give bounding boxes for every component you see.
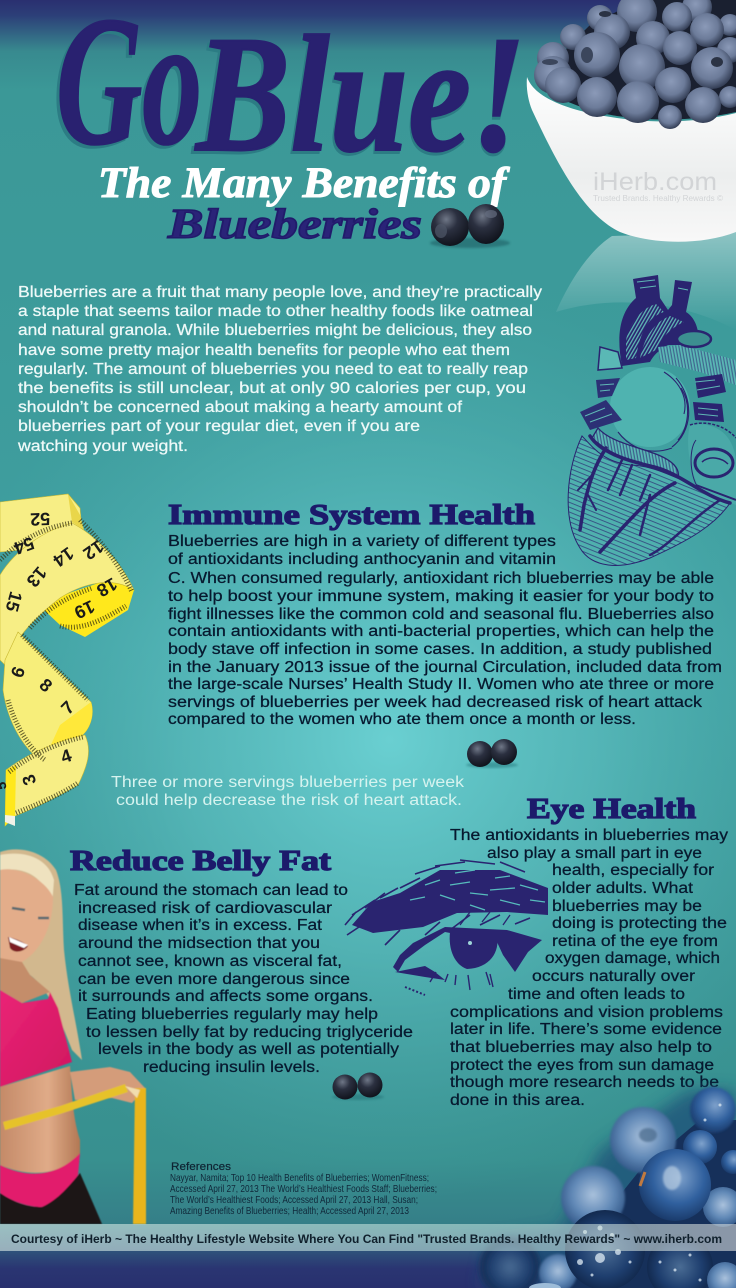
intro text: shouldn’t be concerned about making a hearty amount of xyxy=(18,399,463,416)
image: tape measure xyxy=(0,494,134,826)
bowl watermark: iHerb.com xyxy=(593,168,717,196)
intro text xyxy=(17,284,542,455)
coronary band xyxy=(592,428,678,478)
tape bottom band xyxy=(5,735,89,826)
references list: Accessed April 27, 2013 The World’s Healthiest Foods Staff; Blueberries; xyxy=(170,1183,437,1195)
tape lower curve xyxy=(3,632,92,762)
body text xyxy=(450,827,728,1109)
body text: it surrounds and affects some organs. xyxy=(78,988,373,1005)
soft shadow xyxy=(480,1090,736,1288)
body text: also play a small part in eye xyxy=(487,845,702,862)
tape numbers: 19 xyxy=(71,596,98,623)
bowl xyxy=(527,77,736,242)
callout: could help decrease the risk of heart attack. xyxy=(116,792,462,809)
body text xyxy=(74,882,413,1076)
midriff xyxy=(0,1066,80,1173)
heading: Eye Health xyxy=(527,793,696,825)
references heading: References xyxy=(171,1161,232,1173)
body text: retina of the eye from xyxy=(552,933,718,950)
references list: Amazing Benefits of Blueberries; Health; Accessed April 27, 2013 xyxy=(170,1205,409,1217)
face xyxy=(0,869,53,963)
body text: fight illnesses like the common cold and seasonal flu. Blueberries also xyxy=(168,606,714,623)
subtitle xyxy=(98,160,510,248)
left vessels xyxy=(580,347,622,430)
upper lid xyxy=(393,927,542,972)
arm xyxy=(70,1067,145,1103)
intro text: the benefits is still unclear, but at only 90 calories per cup, you xyxy=(18,380,526,397)
mouth xyxy=(8,937,28,952)
title shadow xyxy=(53,0,526,190)
tape numbers: 13 xyxy=(22,563,51,591)
tape numbers: 54 xyxy=(11,533,37,558)
heading: Reduce Belly Fat xyxy=(70,845,331,877)
body text: body stave off infection in some cases. In addition, a study published xyxy=(168,641,712,658)
image: woman measuring waist xyxy=(0,849,146,1224)
tape numbers: 12 xyxy=(80,536,107,564)
bowl watermark: Trusted Brands. Healthy Rewards © xyxy=(593,193,724,203)
references xyxy=(170,1161,437,1217)
tape back band xyxy=(0,494,82,552)
body text: later in life. There’s some evidence xyxy=(450,1021,722,1038)
measuring tape xyxy=(3,1084,146,1224)
tape numbers xyxy=(0,509,121,791)
body text: increased risk of cardiovascular xyxy=(78,900,332,917)
footer band xyxy=(0,1224,736,1251)
ventricle xyxy=(568,436,730,565)
body text: levels in the body as well as potentially xyxy=(98,1041,399,1058)
title shadow: Blue! xyxy=(191,5,526,190)
body text: though more research needs to be xyxy=(450,1074,719,1091)
body text xyxy=(168,533,722,728)
neck and chest xyxy=(0,958,50,1003)
intro text: watching your weight. xyxy=(17,438,188,455)
subtitle line two: Blueberries xyxy=(167,202,422,248)
body text: cannot see, known as visceral fat, xyxy=(78,953,342,970)
tape numbers: 8 xyxy=(36,675,56,696)
icon: pair of blueberries (lower) xyxy=(332,1072,384,1100)
section: reduce belly fat xyxy=(70,845,413,1076)
body text: oxygen damage, which xyxy=(545,950,720,967)
icon: pair of blueberries (title) xyxy=(430,204,510,248)
footer text: Courtesy of iHerb ~ The Healthy Lifestyle Website Where You Can Find "Trusted Brands. Healthy Rewards" ~ www.iherb.com xyxy=(11,1232,722,1246)
tape numbers: 9 xyxy=(7,664,29,680)
references list: The World’s Healthiest Foods; Accessed April 27, 2013 Hall, Susan; xyxy=(170,1194,418,1206)
body text: reducing insulin levels. xyxy=(143,1059,320,1076)
tape main band xyxy=(0,523,134,665)
references list xyxy=(170,1172,437,1217)
body text: Eating blueberries regularly may help xyxy=(86,1006,378,1023)
body text: done in this area. xyxy=(450,1092,585,1109)
body text: the large-scale Nurses’ Health Study II. Women who ate three or more xyxy=(168,676,714,693)
coronary arteries xyxy=(578,436,730,555)
intro text: have some pretty major health benefits for people who eat them xyxy=(18,342,510,359)
body text: occurs naturally over xyxy=(532,968,695,985)
tape numbers: 4 xyxy=(58,745,74,767)
droplets xyxy=(577,1104,722,1282)
intro text: Blueberries are a fruit that many people love, and they’re practically xyxy=(18,284,542,301)
intro text: a staple that seems tailor made to other healthy foods like oatmeal xyxy=(18,303,533,320)
tape numbers: 14 xyxy=(50,543,77,571)
section: immune system health xyxy=(168,499,722,728)
tape numbers: 18 xyxy=(93,574,121,601)
callout xyxy=(111,774,464,809)
eyebrow xyxy=(345,860,548,945)
heading: Immune System Health xyxy=(168,499,535,531)
tape ticks xyxy=(0,520,132,813)
berries xyxy=(480,1087,736,1288)
pink top xyxy=(0,990,72,1087)
title main: Blue! xyxy=(194,2,526,187)
lower lash xyxy=(395,966,445,980)
illustration: anatomical heart xyxy=(568,275,736,565)
tape numbers: 52 xyxy=(30,509,51,529)
hair back xyxy=(0,849,82,1060)
aorta arch xyxy=(619,275,698,366)
tape numbers: 15 xyxy=(2,589,26,614)
tape numbers: 7 xyxy=(57,697,78,718)
body text: to lessen belly fat by reducing triglyceride xyxy=(86,1024,413,1041)
callout: Three or more servings blueberries per week xyxy=(111,774,464,791)
intro text: regularly. The amount of blueberries you need to eat to really reap xyxy=(18,361,528,378)
iris xyxy=(450,932,498,969)
image: blueberries close-up xyxy=(480,1087,736,1288)
leggings xyxy=(0,1173,102,1224)
atrium xyxy=(610,367,690,451)
body text: disease when it’s in excess. Fat xyxy=(78,917,323,934)
illustration: eye xyxy=(345,860,548,995)
right chamber xyxy=(688,423,736,505)
body text: around the midsection that you xyxy=(78,935,320,952)
intro text: blueberries part of your regular diet, even if you are xyxy=(18,418,420,435)
subtitle line one: The Many Benefits of xyxy=(98,160,510,207)
icon: pair of blueberries (middle) xyxy=(466,739,518,768)
berries xyxy=(534,0,736,129)
body text: that blueberries may also help to xyxy=(450,1039,712,1056)
body text: compared to the women who ate them once a month or less. xyxy=(168,711,636,728)
dark backing xyxy=(570,1120,736,1288)
pink waistband xyxy=(0,1153,80,1207)
body text: in the January 2013 issue of the journal Circulation, included data from xyxy=(168,659,722,676)
body text: older adults. What xyxy=(552,880,694,897)
title main xyxy=(56,0,526,187)
body text: C. When consumed regularly, antioxidant rich blueberries may be able xyxy=(168,570,714,587)
hair strands xyxy=(0,854,54,905)
intro text: and natural granola. While blueberries might be delicious, they also xyxy=(18,322,532,339)
body text: to help boost your immune system, making it easier for your body to xyxy=(168,588,714,605)
section: eye health xyxy=(450,793,728,1109)
title xyxy=(53,0,526,190)
bowl watermark xyxy=(593,168,724,203)
body text: Blueberries are high in a variety of different types xyxy=(168,533,556,550)
body text: servings of blueberries per week had decreased risk of heart attack xyxy=(168,694,702,711)
body text: blueberries may be xyxy=(552,898,702,915)
tape yellow inside xyxy=(44,575,134,637)
body text: of antioxidants including anthocyanin and vitamin xyxy=(168,551,556,568)
body text: complications and vision problems xyxy=(450,1004,723,1021)
eyes xyxy=(12,908,49,918)
references list: Nayyar, Namita; Top 10 Health Benefits of Blueberries; WomenFitness; xyxy=(170,1172,429,1184)
body text: contain antioxidants with anti-bacterial properties, which can help the xyxy=(168,623,714,640)
tape numbers: 3 xyxy=(18,772,40,788)
image: bowl of blueberries xyxy=(527,0,736,242)
pulmonary artery xyxy=(658,331,736,422)
body text: doing is protecting the xyxy=(552,915,727,932)
body text: The antioxidants in blueberries may xyxy=(450,827,728,844)
body text: can be even more dangerous since xyxy=(78,971,350,988)
body text: time and often leads to xyxy=(508,986,685,1003)
body text: health, especially for xyxy=(552,862,714,879)
body text: Fat around the stomach can lead to xyxy=(74,882,348,899)
bowl reflection xyxy=(556,232,736,330)
body text: protect the eyes from sun damage xyxy=(450,1057,714,1074)
